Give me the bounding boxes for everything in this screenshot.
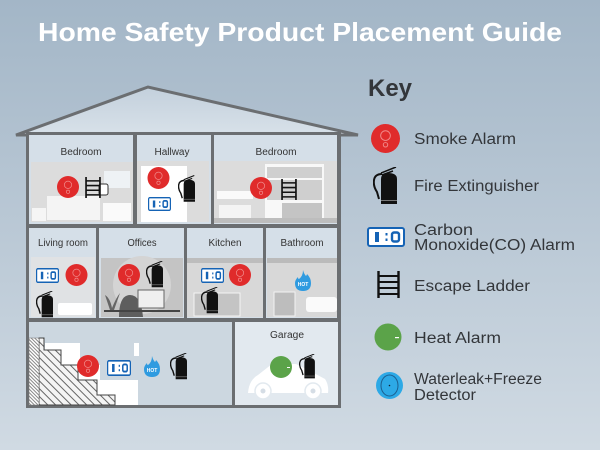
room: bedroom [29,135,133,224]
room: garage [235,322,338,405]
icon: smoke alarm [57,176,79,198]
icon: hot flame: HOT [147,368,157,374]
stairs [39,338,115,405]
icon: escape ladder [86,177,100,198]
key item: fire extinguisher: Fire Extinguisher [414,178,539,195]
icon: extinguisher [171,353,187,379]
room: basement stairs [29,322,232,405]
key [368,75,575,404]
car [248,364,328,399]
label: Kitchen [208,238,242,249]
key item: heat alarm: Heat Alarm [414,330,501,347]
room: kitchen [187,228,263,318]
house [16,87,358,406]
key heading: Key [368,75,413,102]
icon: co alarm [108,361,130,375]
icon: heat alarm [270,356,292,378]
icon: smoke alarm [118,264,140,286]
icon: water / hot detector: HOT [298,282,308,288]
roof [16,87,358,135]
icon: smoke alarm [250,177,272,199]
room: bedroom 2 [214,135,337,224]
key item: escape ladder: Escape Ladder [414,278,530,295]
icon: co alarm [202,269,223,282]
room: bathroom [266,228,337,318]
icon: extinguisher [37,291,53,317]
label: Bedroom [60,147,102,158]
room: offices [99,228,184,318]
room: hallway [137,135,211,224]
title: Home Safety Product Placement Guide [38,17,562,47]
icon: smoke alarm [148,167,170,189]
label: Bathroom [280,238,324,249]
key item: heat alarm [374,324,501,350]
label: Hallway [154,147,190,158]
label: Offices [128,238,156,249]
house walls [28,134,340,406]
icon: extinguisher [300,354,315,378]
key item: co alarm [368,222,575,254]
icon: extinguisher [147,261,163,287]
key item: waterleak detector [376,371,542,404]
icon: co alarm [37,269,58,282]
icon: smoke alarm [66,264,88,286]
key item: smoke alarm: Smoke Alarm [414,131,516,148]
key item: waterleak detector: Waterleak+Freeze [414,371,542,388]
icon: ladder [282,179,296,200]
icon: co alarm [149,198,170,210]
label: Living room [38,238,88,249]
icon: hot flame [144,356,160,377]
key item: co alarm: Carbon [414,222,473,239]
label: Garage [270,330,304,341]
key item: waterleak detector: Detector [414,387,476,404]
key item: fire extinguisher [374,167,539,204]
key item: co alarm: Monoxide(CO) Alarm [414,237,575,254]
room: living room [29,228,96,318]
key item: smoke alarm [371,124,516,153]
icon: extinguisher [202,287,218,313]
icon: smoke alarm [229,264,251,286]
key item: escape ladder [378,271,530,298]
label: Bedroom [256,147,296,158]
icon: smoke alarm [77,355,99,377]
icon: extinguisher [179,176,195,202]
